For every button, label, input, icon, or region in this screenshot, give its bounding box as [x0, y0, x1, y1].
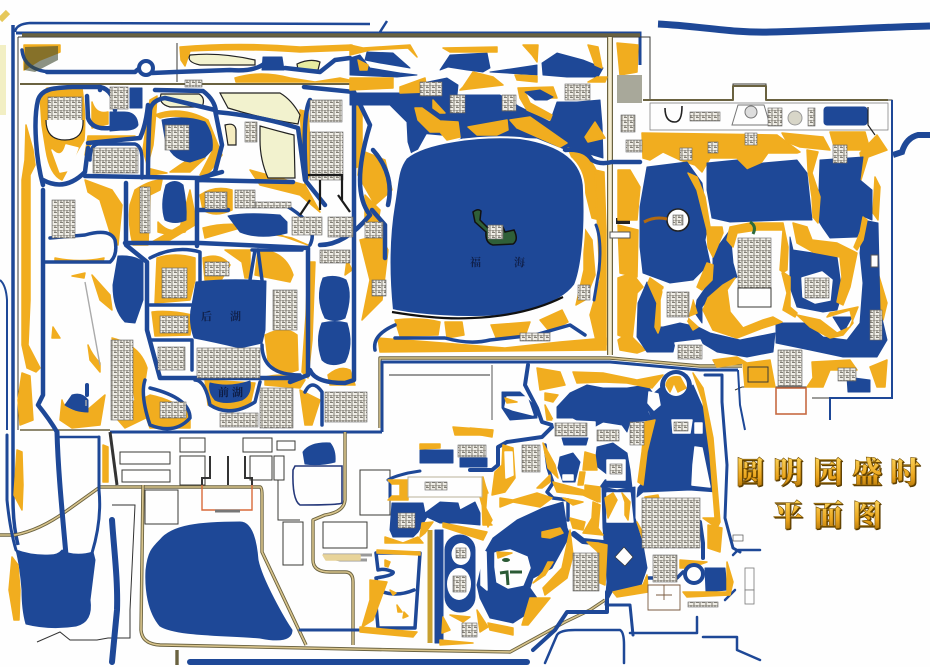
main lake island: [500, 572, 522, 585]
west garden yellow hills: [18, 44, 392, 428]
west lake labels: 前: [218, 385, 229, 399]
title: 盛: [852, 456, 882, 490]
title: 面: [813, 500, 843, 533]
south-west lakes and water channels: [7, 432, 527, 662]
west garden lakes and canals: [22, 50, 370, 432]
Fuhai surrounding buildings: [365, 75, 642, 341]
east garden yellow banks: [618, 132, 887, 387]
south garden lakes: [375, 370, 727, 643]
西 lake: [113, 256, 143, 323]
european palaces strip: [650, 103, 888, 130]
diamond island: [615, 547, 633, 566]
Fuhai lake: [372, 137, 585, 318]
oval islands: [452, 543, 470, 565]
Fuhai lake: 海: [514, 255, 525, 269]
title: 明: [773, 457, 803, 490]
east small island: [802, 272, 832, 303]
east garden islands and buildings: [610, 103, 888, 414]
north lake canal: [47, 63, 265, 73]
后湖 lake: [190, 280, 266, 348]
south pavilion island: [663, 287, 692, 320]
前湖 lake: [210, 381, 250, 402]
west lake labels: 湖: [232, 385, 243, 399]
east garden lakes: [637, 107, 887, 392]
central palace: [738, 238, 771, 288]
title: 平: [773, 500, 803, 533]
white compound wall: [408, 477, 482, 497]
south garden yellow banks: [360, 368, 733, 645]
title: 时: [890, 457, 920, 490]
title: [735, 456, 920, 533]
south garden islands and buildings: [398, 374, 754, 637]
west lake labels: [201, 309, 243, 399]
north-east round island: [665, 374, 687, 396]
round island pavilion: [644, 209, 689, 231]
west lake labels: 后: [201, 309, 212, 323]
west garden building compounds: [24, 46, 367, 428]
north water belt and yellow banks: [350, 43, 640, 352]
west lake labels: 湖: [230, 309, 241, 323]
double lake: [319, 276, 349, 320]
title: 园: [813, 457, 843, 490]
outer rivers and moats: [0, 12, 930, 545]
title: 图: [852, 500, 882, 533]
east garden yellow strips on water: [648, 150, 867, 338]
small ring island: [685, 565, 703, 583]
south garden canals: [376, 365, 760, 663]
west garden pale hill areas: [160, 54, 320, 178]
title: 圆: [735, 457, 765, 490]
Fuhai lake: 福: [470, 255, 481, 269]
